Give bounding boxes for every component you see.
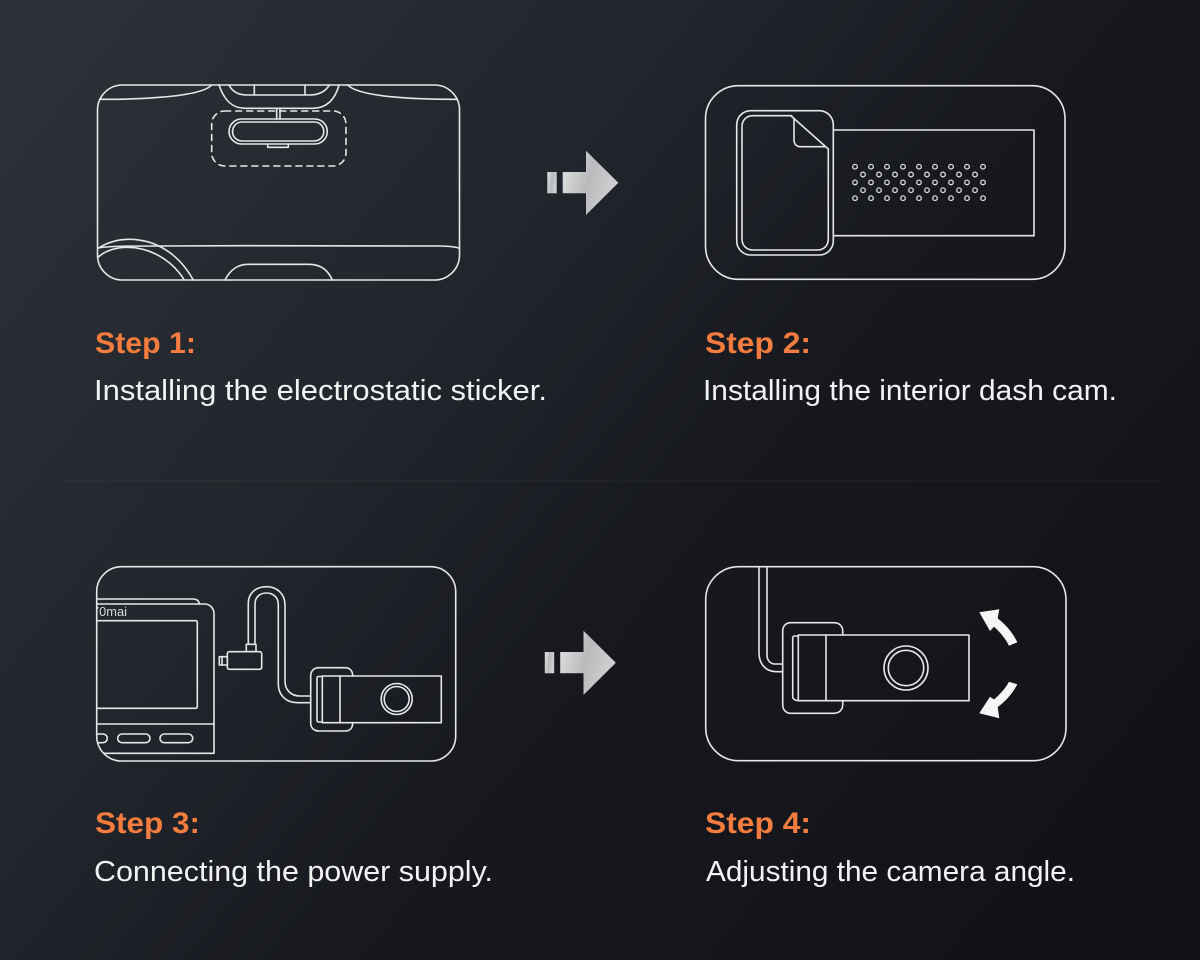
panel: step 3 power cable illustration: [80, 567, 456, 761]
panel: step 2 sticker illustration: [706, 86, 1065, 279]
icon: rotate down arrow: [979, 682, 1017, 718]
panel: step 1 windshield illustration: [98, 85, 460, 280]
rear camera: [311, 668, 441, 731]
text: step 2 description: Installing the interior dash cam.: [703, 375, 1117, 407]
front dash cam body: 70mai: [92, 605, 127, 619]
sticker dot grid: [853, 164, 985, 200]
heading: step 4: Step 4:: [705, 807, 811, 840]
arrow: step 1 to step 2: [547, 151, 618, 215]
heading: step 2: Step 2:: [705, 327, 811, 360]
front dash cam body: [97, 598, 215, 754]
panel: step 4 camera angle illustration: [706, 567, 1066, 761]
icon: rotate up arrow: [979, 609, 1017, 646]
heading: step 1: Step 1:: [95, 327, 196, 360]
text: step 3 description: Connecting the power supply.: [94, 856, 493, 888]
arrow: step 3 to step 4: [545, 631, 616, 695]
text: step 4 description: Adjusting the camera angle.: [706, 856, 1075, 888]
power connector: [219, 644, 262, 669]
heading: step 3: Step 3:: [95, 807, 200, 840]
text: step 1 description: Installing the electrostatic sticker.: [94, 375, 547, 407]
